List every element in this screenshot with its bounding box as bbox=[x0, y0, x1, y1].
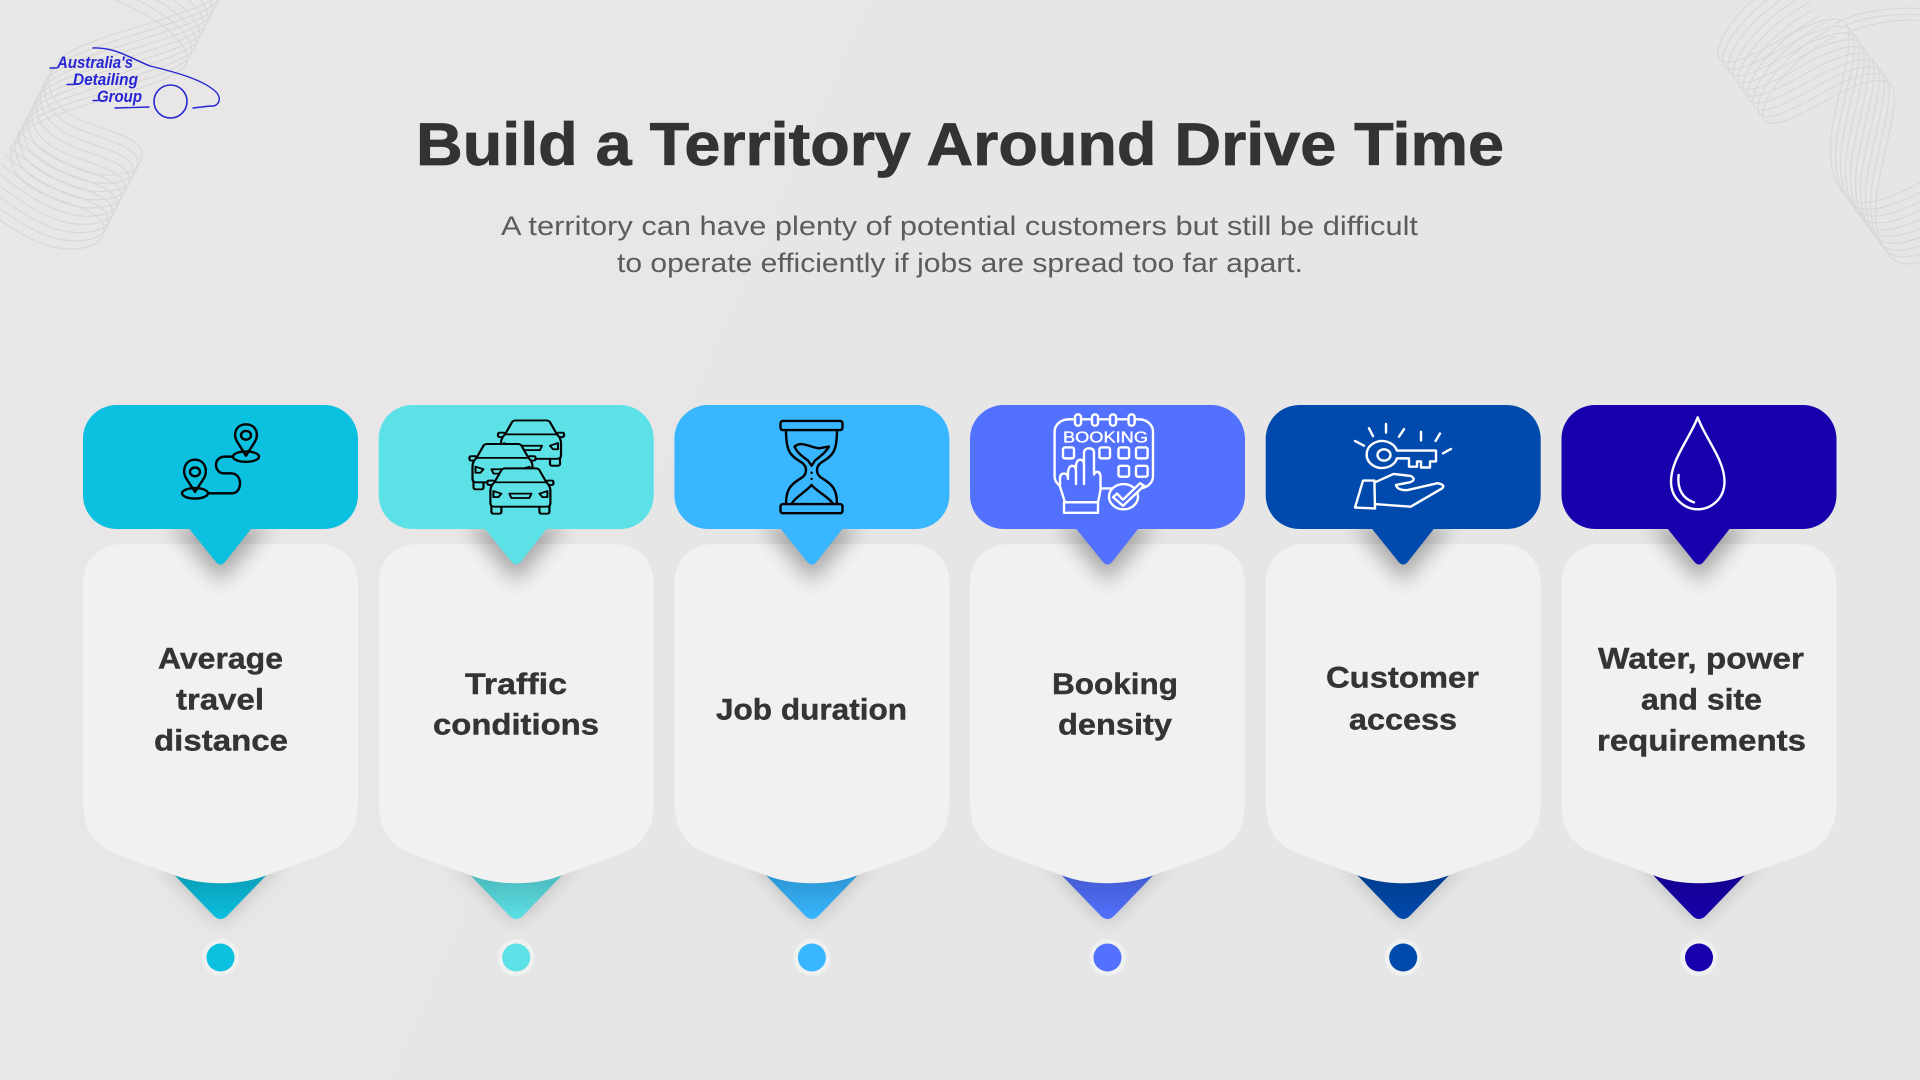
panel: booking density bbox=[970, 405, 1245, 976]
subtitle: to operate efficiently if jobs are spread too far apart. bbox=[617, 248, 1303, 278]
icon: route between map pins bbox=[182, 424, 259, 499]
logo: Australia's Detailing Group bbox=[50, 48, 219, 118]
label: average travel distance: Average bbox=[158, 642, 283, 676]
icon: key above open hand bbox=[1355, 424, 1451, 508]
label: booking density: density bbox=[1058, 708, 1172, 742]
panel: average travel distance bbox=[83, 405, 358, 976]
logo: Australia's Detailing Group: Detailing bbox=[73, 70, 139, 89]
label: water, power and site requirements: requirements bbox=[1597, 724, 1806, 758]
label: customer access: Customer bbox=[1326, 662, 1479, 694]
label: average travel distance: distance bbox=[154, 724, 288, 758]
label: booking density bbox=[1052, 668, 1178, 742]
panel: water, power and site requirements bbox=[1562, 405, 1836, 976]
subtitle: A territory can have plenty of potential customers but still be difficult bbox=[501, 211, 1419, 241]
label: customer access bbox=[1326, 662, 1479, 736]
label: job duration: Job duration bbox=[716, 694, 907, 726]
icon: booking calendar with hand and check: BOOKING bbox=[1063, 429, 1148, 446]
label: water, power and site requirements: and site bbox=[1641, 684, 1762, 716]
label: traffic conditions bbox=[433, 668, 599, 742]
icon: water drop bbox=[1671, 417, 1724, 509]
panel: customer access bbox=[1266, 405, 1541, 976]
label: booking density: Booking bbox=[1052, 668, 1178, 701]
icon: booking calendar with hand and check bbox=[1055, 414, 1153, 513]
logo: Australia's Detailing Group: Group bbox=[97, 87, 142, 106]
label: customer access: access bbox=[1349, 704, 1457, 736]
title: Build a Territory Around Drive Time bbox=[416, 111, 1504, 178]
icon: hourglass bbox=[780, 421, 842, 513]
label: average travel distance bbox=[154, 642, 288, 758]
subtitle bbox=[501, 211, 1419, 278]
logo: Australia's Detailing Group: Australia's bbox=[56, 53, 133, 72]
label: water, power and site requirements bbox=[1597, 642, 1806, 758]
label: traffic conditions: Traffic bbox=[465, 668, 567, 701]
label: average travel distance: travel bbox=[176, 684, 264, 716]
label: traffic conditions: conditions bbox=[433, 708, 599, 742]
icon: three cars in traffic bbox=[470, 420, 564, 514]
label: water, power and site requirements: Water, power bbox=[1598, 642, 1804, 676]
panel: traffic conditions bbox=[379, 405, 654, 976]
panel: job duration bbox=[674, 405, 949, 976]
